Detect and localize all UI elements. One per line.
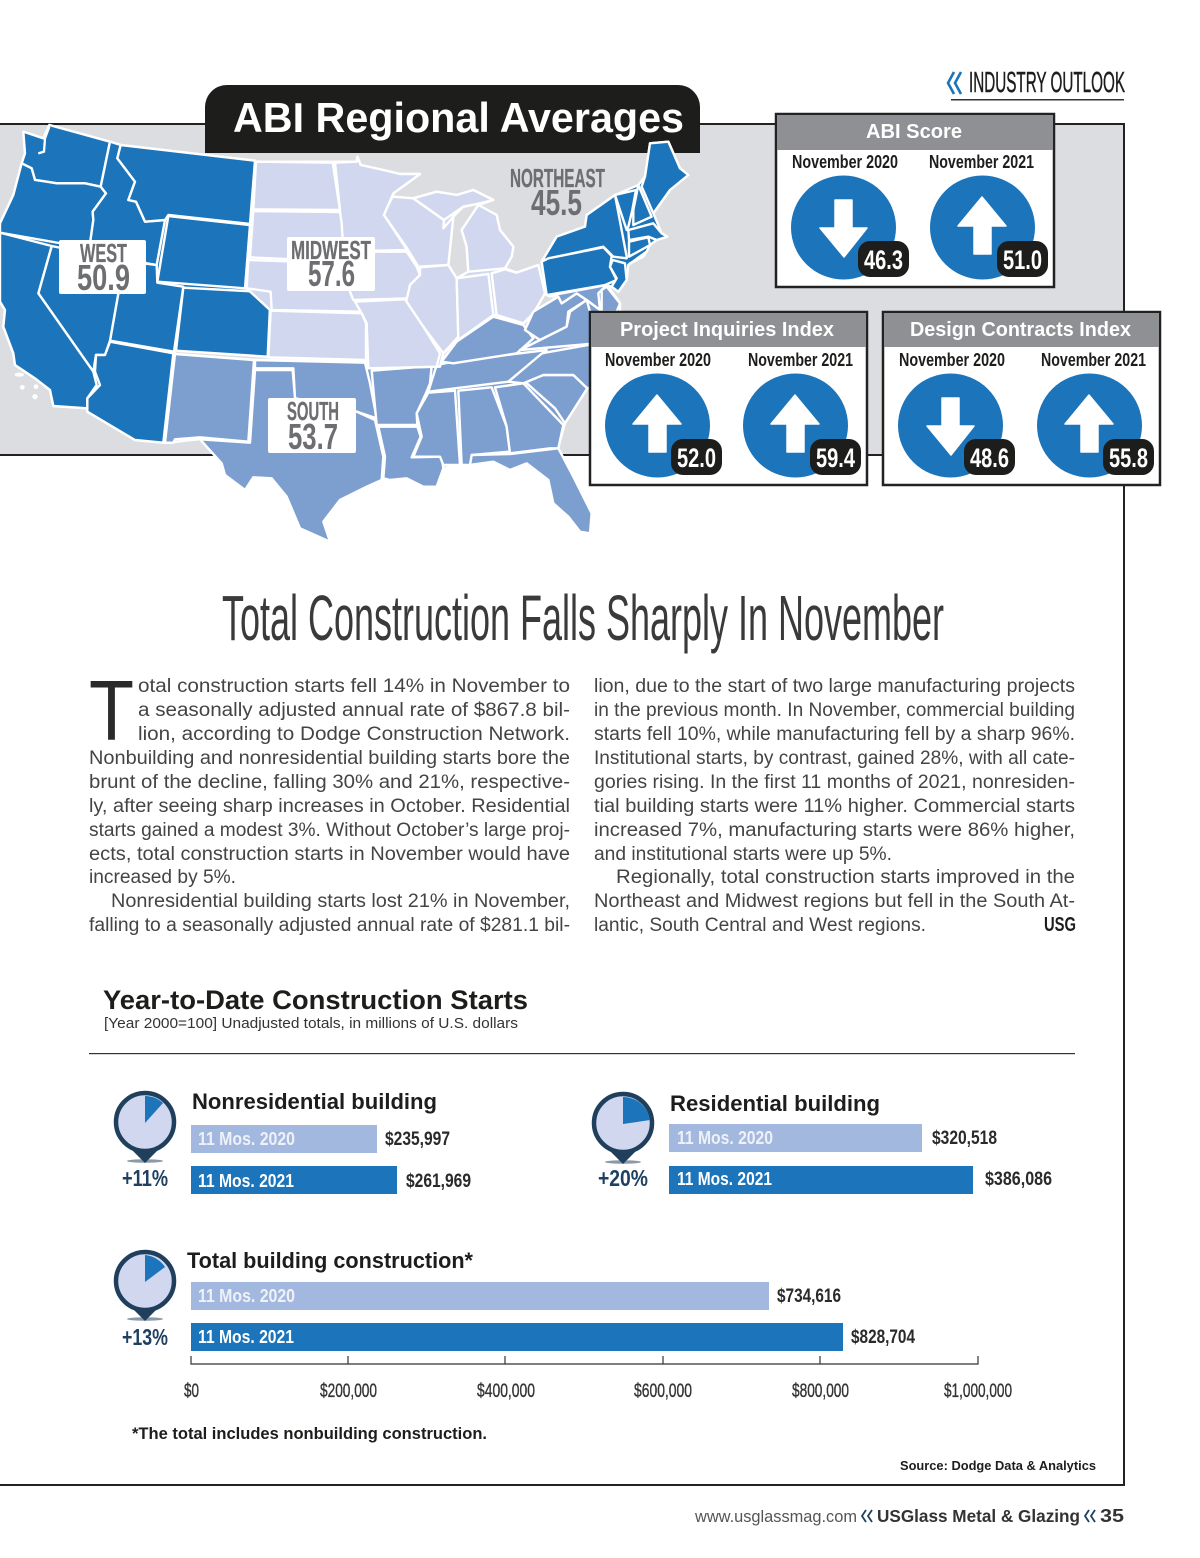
chart: nonresidential building: $235,997 — [385, 1129, 450, 1150]
panel: Design Contracts Index: November 2021 — [1041, 350, 1146, 370]
chart axis: $400,000 — [477, 1381, 535, 1402]
panel: Project Inquiries Index — [590, 312, 867, 485]
panel: ABI Score: November 2021 — [929, 152, 1034, 172]
section tag: industry outlook — [948, 67, 1125, 100]
chart: nonresidential building: 11 Mos. 2021 — [198, 1170, 294, 1191]
icon: up arrow, November 2020 — [605, 374, 722, 478]
article text: right column: increased 7%, manufacturing starts were 86% higher, — [594, 820, 1075, 841]
page footer: www.usglassmag.com — [694, 1508, 857, 1526]
chart axis: $0 — [184, 1381, 199, 1402]
chart: total building construction: 11 Mos. 2020 — [198, 1285, 295, 1306]
icon: down arrow, November 2020: 48.6 — [970, 443, 1009, 473]
article text: right column: Institutional starts, by contrast, gained 28%, with all cate- — [594, 748, 1075, 769]
icon: up arrow, November 2021 — [743, 374, 861, 478]
US map — [0, 125, 688, 542]
article text: right column: and institutional starts were up 5%. — [594, 844, 892, 865]
icon: up arrow, November 2021 — [1037, 374, 1154, 478]
article text: left column: brunt of the decline, falling 30% and 21%, respective- — [89, 772, 570, 793]
article text: left column: increased by 5%. — [89, 867, 236, 888]
region label: west: WEST — [80, 238, 127, 268]
chart: residential building: Residential building — [670, 1091, 880, 1116]
new mexico — [165, 354, 254, 443]
chart: nonresidential building: +11% — [122, 1165, 168, 1191]
chart axis: $800,000 — [792, 1381, 849, 1402]
region label: northeast: NORTHEAST — [510, 163, 605, 193]
chart: residential building: $386,086 — [985, 1169, 1052, 1190]
article text: left column: ects, total construction starts in November would have — [89, 844, 570, 865]
chart: total building construction: 11 Mos. 2021 — [198, 1326, 294, 1347]
icon: pin gauge +13% — [116, 1252, 174, 1321]
article text: right column: in the previous month. In November, commercial building — [594, 700, 1075, 721]
icon: up arrow, November 2021: 59.4 — [816, 443, 855, 473]
region label: south: SOUTH — [287, 396, 339, 426]
article text: right column: gories rising. In the first 11 months of 2021, nonresiden- — [594, 772, 1075, 793]
northeast region states — [542, 142, 688, 295]
article text: right column: USG — [1044, 914, 1076, 936]
icon: up arrow, November 2021: 55.8 — [1109, 443, 1148, 473]
panel: Project Inquiries Index: November 2020 — [605, 350, 711, 370]
mid-atlantic states — [520, 285, 620, 350]
title banner — [205, 85, 700, 153]
page footer: USGlass Metal & Glazing — [877, 1506, 1080, 1526]
chart: nonresidential building — [116, 1089, 471, 1194]
chart axis — [184, 1356, 1012, 1402]
chart axis: $600,000 — [634, 1381, 692, 1402]
icon: up arrow, November 2020: 52.0 — [677, 443, 716, 473]
south region silhouette — [165, 285, 620, 542]
puget sound and channel islands — [15, 127, 49, 399]
panel: ABI Score: November 2020 — [792, 152, 898, 172]
article text: left column: ly, after seeing sharp increases in October. Residential — [89, 796, 570, 817]
map background panel — [0, 123, 1125, 456]
west region states — [0, 125, 271, 443]
article text: right column: Regionally, total construction starts improved in the — [616, 867, 1075, 888]
chart: residential building: 11 Mos. 2021 — [677, 1168, 772, 1189]
article text: right column: Northeast and Midwest regions but fell in the South At- — [594, 891, 1075, 912]
region label: midwest — [287, 235, 375, 294]
chart: total building construction: +13% — [122, 1324, 168, 1350]
icon: pin gauge +11% — [116, 1093, 174, 1163]
panel: Project Inquiries Index: November 2021 — [748, 350, 853, 370]
chart: residential building: $320,518 — [932, 1128, 997, 1149]
panel: Design Contracts Index — [883, 312, 1160, 485]
icon: up arrow, November 2021 — [930, 176, 1048, 280]
chart: nonresidential building: 11 Mos. 2020 — [198, 1128, 295, 1149]
chart: total building construction: $828,704 — [851, 1327, 915, 1348]
icon: pin gauge +20% — [594, 1094, 652, 1164]
footnote: *The total includes nonbuilding construction. — [132, 1425, 487, 1443]
chart: total building construction: Total building construction* — [187, 1248, 473, 1273]
south region states — [200, 343, 607, 542]
article text: left column — [89, 664, 570, 936]
title banner: ABI Regional Averages — [233, 94, 684, 141]
panel: ABI Score: ABI Score — [866, 121, 962, 143]
region label: northeast — [510, 163, 605, 223]
chart: total building construction — [116, 1248, 915, 1351]
article text: left column: falling to a seasonally adjusted annual rate of $281.1 bil- — [89, 915, 570, 936]
article text: left column: lion, according to Dodge Construction Network. — [138, 724, 570, 745]
icon: down arrow, November 2020: 46.3 — [864, 245, 903, 275]
chart: total building construction: $734,616 — [777, 1286, 841, 1307]
article text: left column: otal construction starts fell 14% in November to — [138, 676, 570, 697]
chart: residential building — [594, 1091, 1052, 1194]
article text: left column: Nonbuilding and nonresidential building starts bore the — [89, 748, 570, 769]
panel: Project Inquiries Index: Project Inquiries Index — [620, 319, 834, 341]
region label: south: 53.7 — [288, 416, 338, 457]
chart: residential building: +20% — [598, 1165, 648, 1191]
chart heading — [103, 985, 528, 1032]
midwest region states — [247, 157, 545, 368]
icon: down arrow, November 2020 — [791, 176, 909, 280]
article text: left column: Nonresidential building starts lost 21% in November, — [111, 891, 570, 912]
panel: Design Contracts Index: November 2020 — [899, 350, 1005, 370]
chart: nonresidential building: Nonresidential building — [192, 1089, 437, 1114]
page footer: 35 — [1100, 1506, 1124, 1526]
central appalachian states — [442, 317, 533, 363]
article text: right column: lion, due to the start of two large manufacturing projects — [594, 676, 1075, 697]
article text: right column: starts fell 10%, while manufacturing fell by a sharp 96%. — [594, 724, 1075, 745]
source note: Source: Dodge Data & Analytics — [900, 1459, 1096, 1473]
panel: Design Contracts Index: Design Contracts Index — [910, 319, 1131, 341]
article text: left column: T — [89, 664, 134, 759]
article text: right column: tial building starts were 11% higher. Commercial starts — [594, 796, 1075, 817]
chart heading: [Year 2000=100] Unadjusted totals, in millions of U.S. dollars — [104, 1015, 518, 1032]
icon: up arrow, November 2021: 51.0 — [1003, 245, 1042, 275]
chart axis: $1,000,000 — [944, 1381, 1012, 1402]
article text: left column: starts gained a modest 3%. Without October’s large proj- — [89, 820, 570, 841]
chart heading: Year-to-Date Construction Starts — [103, 985, 528, 1015]
region label: midwest: 57.6 — [308, 253, 355, 294]
region label: south — [268, 396, 356, 457]
article text: right column: lantic, South Central and West regions. — [594, 915, 926, 936]
region label: west: 50.9 — [77, 257, 130, 298]
chart: residential building: 11 Mos. 2020 — [677, 1127, 773, 1148]
chart: nonresidential building: $261,969 — [406, 1171, 471, 1192]
region label: west — [59, 238, 146, 298]
region label: northeast: 45.5 — [531, 182, 582, 223]
region label: midwest: MIDWEST — [291, 235, 371, 265]
icon: down arrow, November 2020 — [898, 374, 1015, 478]
panel: ABI Score — [776, 114, 1054, 287]
chart axis: $200,000 — [320, 1381, 377, 1402]
article text: left column: a seasonally adjusted annual rate of $867.8 bil- — [138, 700, 570, 721]
article text: right column — [594, 676, 1076, 936]
page footer — [694, 1506, 1124, 1526]
